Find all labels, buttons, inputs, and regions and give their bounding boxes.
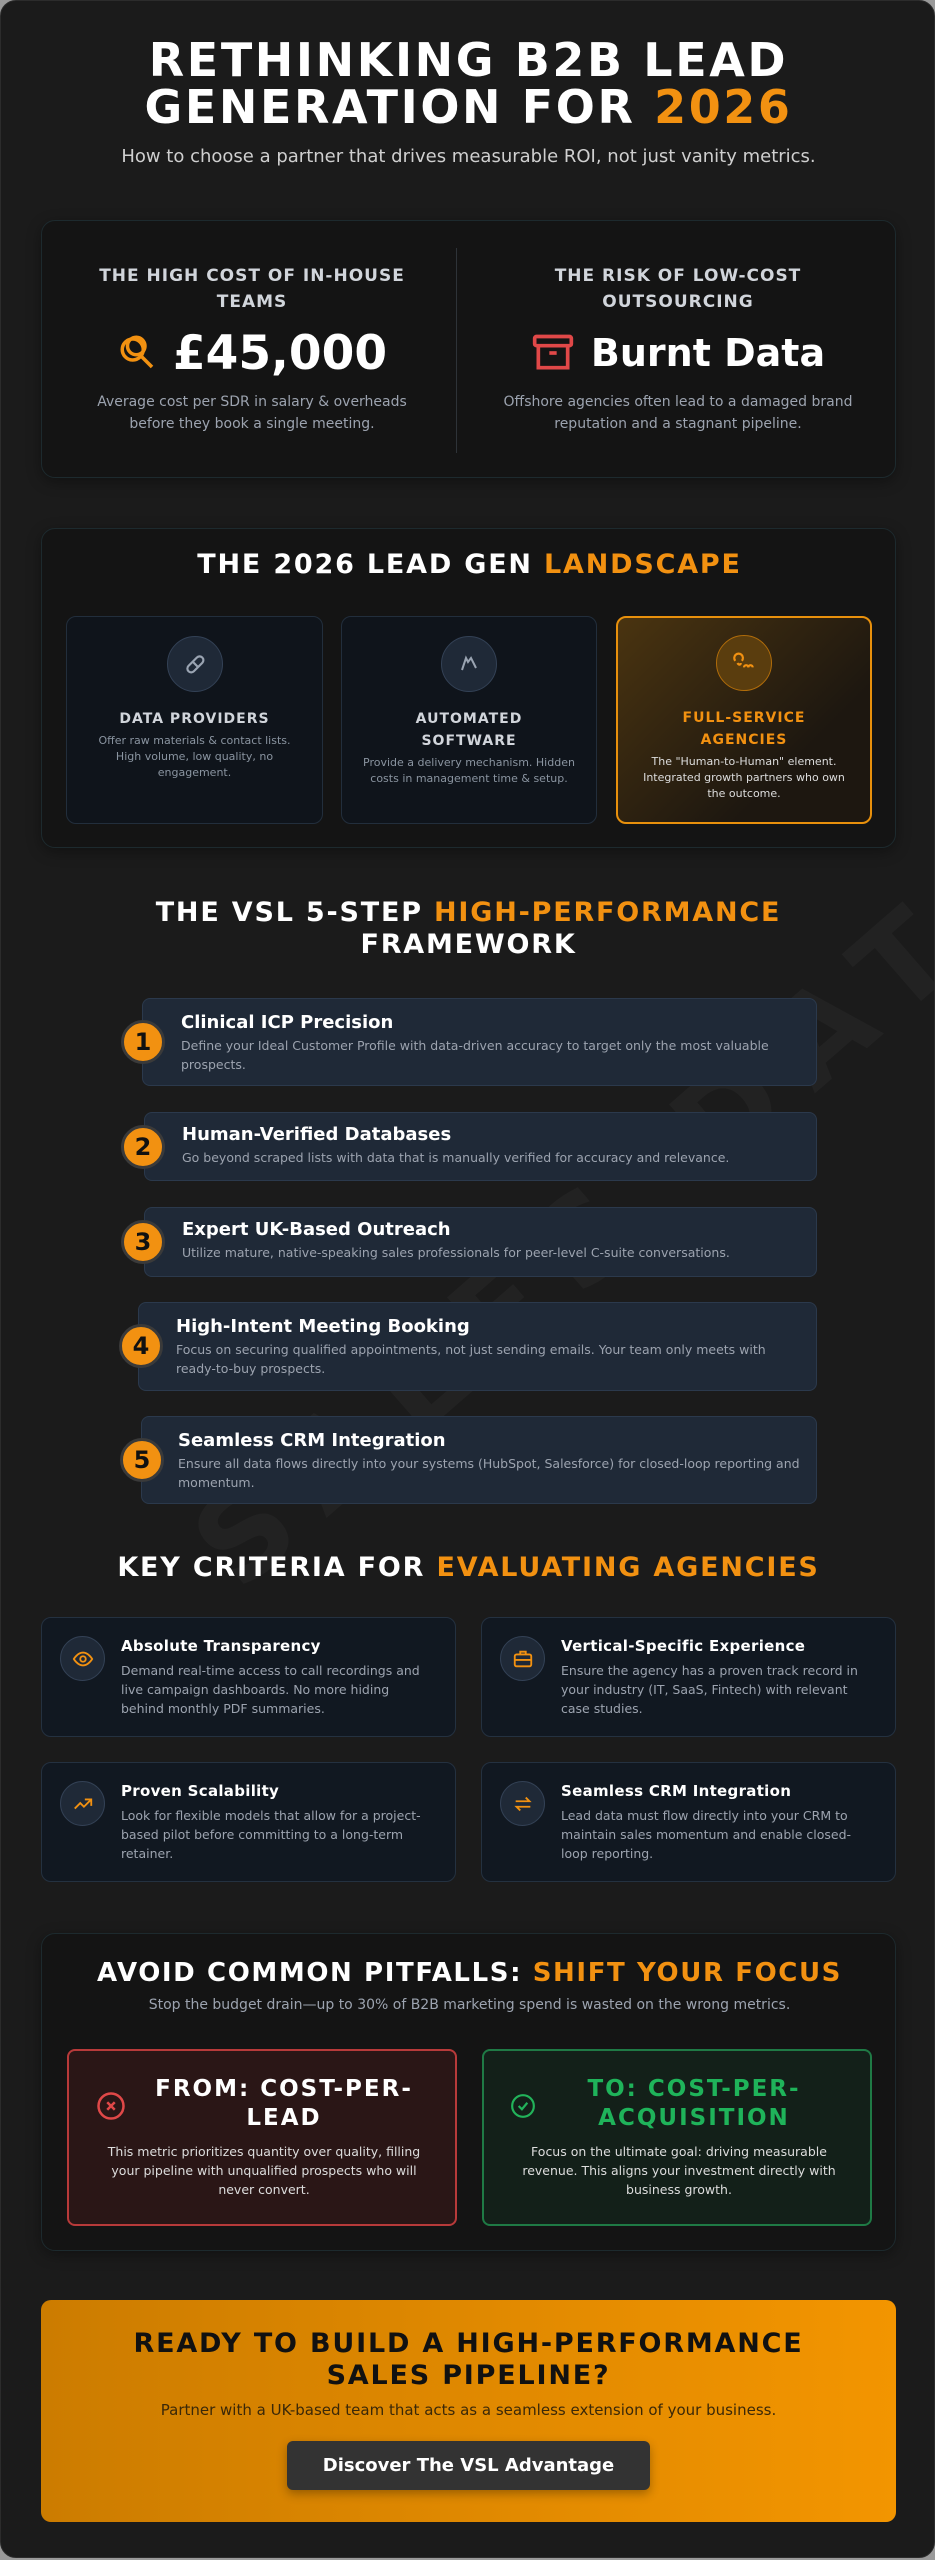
icon: x circle [97,2092,125,2120]
box: to cost-per-acquisition [482,2049,872,2226]
column: low-cost risk: THE RISK OF LOW-COST [555,266,801,286]
column: in-house cost: THE HIGH COST OF IN-HOUSE [99,266,405,286]
icon: archive box [532,334,574,370]
column: low-cost risk [504,266,852,432]
column: in-house cost: Average cost per SDR in salary & overheads [97,394,407,410]
cta heading: SALES PIPELINE? [327,2360,610,2391]
step 2: Human-Verified Databases [182,1124,451,1145]
card: full-service agencies: The "Human-to-Human" element. Integrated growth partners who own the outcome. [643,755,845,800]
subtitle: How to choose a partner that drives measurable ROI, not just vanity metrics. [121,146,816,167]
card: data providers [66,616,323,824]
step 5: Seamless CRM Integration [178,1430,446,1451]
column: low-cost risk: Burnt Data [591,331,825,375]
box: to cost-per-acquisition: Focus on the ultimate goal: driving measurable revenue. This aligns your investment directly with business growth. [522,2144,836,2197]
criteria: transparency: Absolute Transparency [121,1637,321,1655]
step 1 [121,998,817,1086]
criteria: crm integration: Lead data must flow directly into your CRM to maintain sales momentum and enable closed-loop reporting. [561,1808,851,1861]
criteria: transparency: Demand real-time access to call recordings and live campaign dashboards. No more hiding behind monthly PDF summaries. [121,1663,420,1716]
step 1: Clinical ICP Precision [181,1012,393,1033]
criteria: vertical experience [481,1617,896,1737]
step 3: Utilize mature, native-speaking sales professionals for peer-level C-suite conversations. [182,1245,730,1260]
step 5: 5 [134,1446,150,1474]
title [144,33,793,134]
box: to cost-per-acquisition: ACQUISITION [598,2105,790,2131]
column: in-house cost: before they book a single meeting. [129,416,375,432]
box: from cost-per-lead: LEAD [246,2105,322,2131]
panel: pitfalls [41,1933,896,2251]
column: in-house cost: £45,000 [173,326,387,380]
column: low-cost risk: OUTSOURCING [602,292,754,312]
column: low-cost risk: Offshore agencies often lead to a damaged brand [504,394,852,410]
step 5 [120,1416,817,1504]
title: RETHINKING B2B LEAD [149,33,788,87]
step 3: Expert UK-Based Outreach [182,1219,451,1240]
criteria: scalability: Proven Scalability [121,1782,279,1800]
step 3 [121,1207,817,1277]
card: data providers: DATA PROVIDERS [119,711,270,727]
cta button [287,2441,650,2490]
card: full-service agencies [616,616,872,824]
cta button: Discover The VSL Advantage [323,2455,614,2476]
panel: landscape [41,528,896,848]
step 2 [121,1112,817,1181]
card: full-service agencies: AGENCIES [701,732,787,748]
criteria: crm integration: Seamless CRM Integration [561,1782,791,1800]
subtext: Stop the budget drain—up to 30% of B2B marketing spend is wasted on the wrong metrics. [149,1997,790,2013]
step 4: 4 [133,1332,149,1360]
heading: key criteria: KEY CRITERIA FOR EVALUATING AGENCIES [117,1552,820,1583]
box: to cost-per-acquisition: TO: COST-PER- [587,2076,801,2102]
card: automated software [341,616,597,824]
card: full-service agencies: FULL-SERVICE [683,710,805,726]
box: from cost-per-lead: This metric prioritizes quantity over quality, filling your pipeline with unqualified prospects who will never convert. [108,2144,420,2197]
column: in-house cost: TEAMS [217,292,287,312]
card: automated software: Provide a delivery mechanism. Hidden costs in management time & setup. [363,756,575,785]
icon: coins search [120,336,154,368]
step 4: High-Intent Meeting Booking [176,1316,470,1337]
step 4: Focus on securing qualified appointments, not just sending emails. Your team only meets with ready-to-buy prospects. [176,1342,766,1376]
box: from cost-per-lead: FROM: COST-PER- [155,2076,413,2102]
heading: pitfalls: AVOID COMMON PITFALLS: SHIFT YOUR FOCUS [97,1958,842,1988]
column: low-cost risk: reputation and a stagnant pipeline. [554,416,802,432]
heading: landscape: THE 2026 LEAD GEN LANDSCAPE [197,549,742,580]
step 3: 3 [135,1228,151,1256]
step 4 [119,1302,817,1391]
cta heading: READY TO BUILD A HIGH-PERFORMANCE [134,2328,804,2359]
icon: check circle [511,2094,535,2118]
column: in-house cost [97,266,407,432]
criteria: transparency [41,1617,456,1737]
heading: framework: FRAMEWORK [360,929,577,960]
criteria: vertical experience: Vertical-Specific Experience [561,1637,805,1655]
criteria: scalability [41,1762,456,1882]
panel: cost comparison [41,220,896,478]
heading: framework: THE VSL 5-STEP HIGH-PERFORMANCE [156,897,781,928]
step 2: 2 [135,1133,151,1161]
criteria: vertical experience: Ensure the agency has a proven track record in your industry (IT, SaaS, Fintech) with relevant case studies. [561,1663,858,1716]
title: GENERATION FOR 2026 [144,80,793,134]
step 1: 1 [135,1028,151,1056]
card: automated software: AUTOMATED [416,711,522,727]
step 5: Ensure all data flows directly into your systems (HubSpot, Salesforce) for closed-loop reporting and momentum. [178,1456,800,1490]
cta banner [41,2300,896,2522]
cta subtext: Partner with a UK-based team that acts as a seamless extension of your business. [161,2401,776,2419]
cta heading [134,2328,804,2391]
criteria: crm integration [481,1762,896,1882]
card: data providers: Offer raw materials & contact lists. High volume, low quality, no engagement. [98,734,291,779]
criteria: scalability: Look for flexible models that allow for a project-based pilot before committing to a long-term retainer. [121,1808,421,1861]
heading: framework [156,897,781,960]
step 1: Define your Ideal Customer Profile with data-driven accuracy to target only the most valuable prospects. [181,1038,769,1072]
card: automated software: SOFTWARE [421,733,517,749]
step 2: Go beyond scraped lists with data that is manually verified for accuracy and relevance. [182,1150,729,1165]
box: from cost-per-lead [67,2049,457,2226]
